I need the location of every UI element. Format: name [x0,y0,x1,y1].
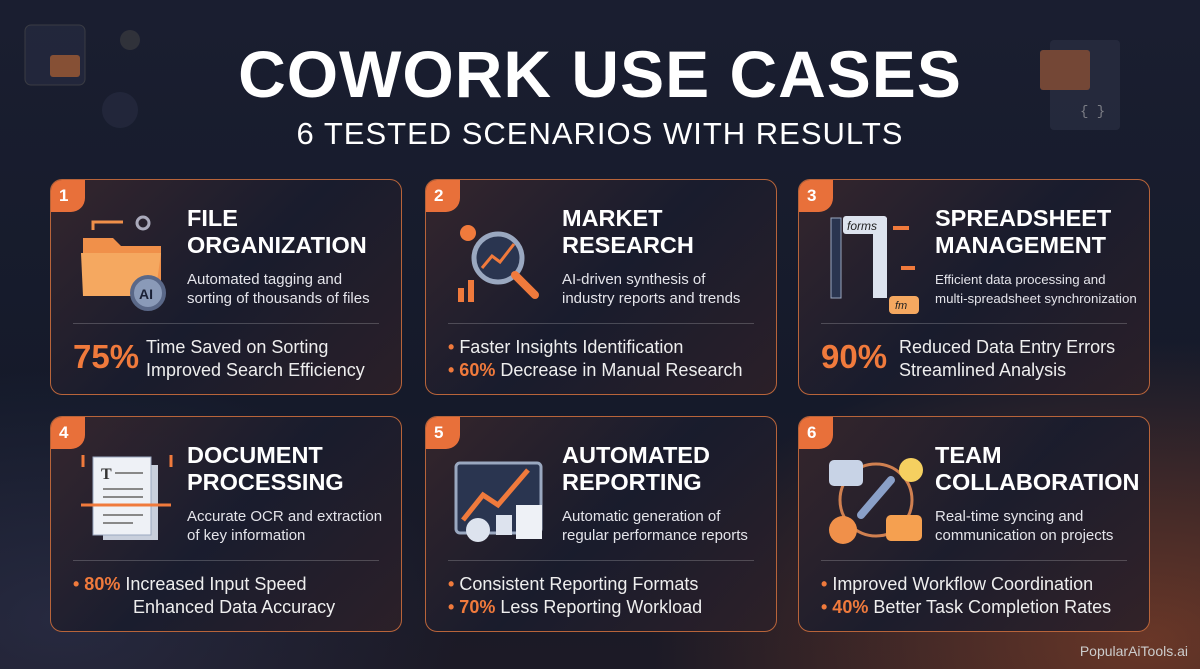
panel: automated reporting: Automatic generation of [562,508,720,525]
panel: automated reporting: REPORTING [562,469,702,495]
panel: team collaboration: Real-time syncing and [935,508,1083,525]
decorative icon top-left [24,24,140,128]
panel: automated reporting: • 70% Less Reporting Workload [448,597,702,617]
icon: spreadsheet forms [830,216,919,314]
panel: automated reporting [425,416,777,632]
panel: file organization: 75% [73,338,139,375]
panel: file organization [50,179,402,395]
panel: document processing: DOCUMENT [187,442,323,468]
decorative icon top-right [1040,40,1120,130]
panel: team collaboration: COLLABORATION [935,469,1140,495]
panel: document processing [50,416,402,632]
title: COWORK USE CASES [238,37,962,111]
panel: market research: RESEARCH [562,232,694,258]
panel: team collaboration: • Improved Workflow Coordination [821,574,1093,594]
subtitle: 6 TESTED SCENARIOS WITH RESULTS [297,116,903,151]
panel: team collaboration: • 40% Better Task Completion Rates [821,597,1111,617]
panel: team collaboration: communication on projects [935,527,1113,544]
icon: spreadsheet forms: forms [847,219,877,233]
icon: document scan [81,455,172,540]
panel: automated reporting: AUTOMATED [562,442,710,468]
panel: team collaboration [798,416,1150,632]
panel: automated reporting: • Consistent Reporting Formats [448,574,698,594]
panel: spreadsheet management: SPREADSHEET [935,205,1111,231]
panel: market research [425,179,777,395]
panel: market research: industry reports and trends [562,290,740,307]
panel: spreadsheet management: multi-spreadsheet synchronization [935,291,1137,306]
panel: file organization: FILE [187,205,238,231]
panel: document processing: Enhanced Data Accuracy [133,597,335,617]
icon: magnifier chart [458,225,539,302]
panel: market research: 2 [434,186,443,205]
panel: market research: • Faster Insights Identification [448,337,683,357]
panel: file organization: Automated tagging and [187,271,342,288]
panel: automated reporting: regular performance reports [562,527,748,544]
panel: document processing: of key information [187,527,305,544]
watermark: PopularAiTools.ai [1080,643,1188,659]
panel: document processing: Accurate OCR and extraction [187,508,382,525]
panel: team collaboration: TEAM [935,442,1002,468]
panel: automated reporting: 5 [434,423,443,442]
panel: spreadsheet management [798,179,1150,395]
panel: file organization: Time Saved on Sorting [146,337,328,357]
panel: spreadsheet management: MANAGEMENT [935,232,1106,258]
panel: market research: MARKET [562,205,663,231]
icon: collaboration links [829,458,923,544]
panel: spreadsheet management: Streamlined Analysis [899,360,1066,380]
icon: spreadsheet forms: fm [895,300,907,312]
icon: folder with AI gear: AI [139,286,153,302]
panel: spreadsheet management: Efficient data processing and [935,272,1106,287]
panel: team collaboration: 6 [807,423,816,442]
panel: spreadsheet management: 90% [821,338,887,375]
panel: file organization: Improved Search Efficiency [146,360,365,380]
panel: market research: • 60% Decrease in Manual Research [448,360,742,380]
panel: file organization: ORGANIZATION [187,232,367,258]
decorative icon top-right: { } [1080,104,1105,120]
icon: document scan: T [101,466,112,483]
panel: spreadsheet management: Reduced Data Entry Errors [899,337,1115,357]
icon: folder with AI gear [81,216,166,311]
panel: document processing: PROCESSING [187,469,344,495]
panel: file organization: sorting of thousands of files [187,290,370,307]
panel: document processing: • 80% Increased Input Speed [73,574,306,594]
icon: report chart [454,462,542,542]
panel: document processing: 4 [59,423,68,442]
panel: market research: AI-driven synthesis of [562,271,705,288]
panel: file organization: 1 [59,186,68,205]
panel: spreadsheet management: 3 [807,186,816,205]
